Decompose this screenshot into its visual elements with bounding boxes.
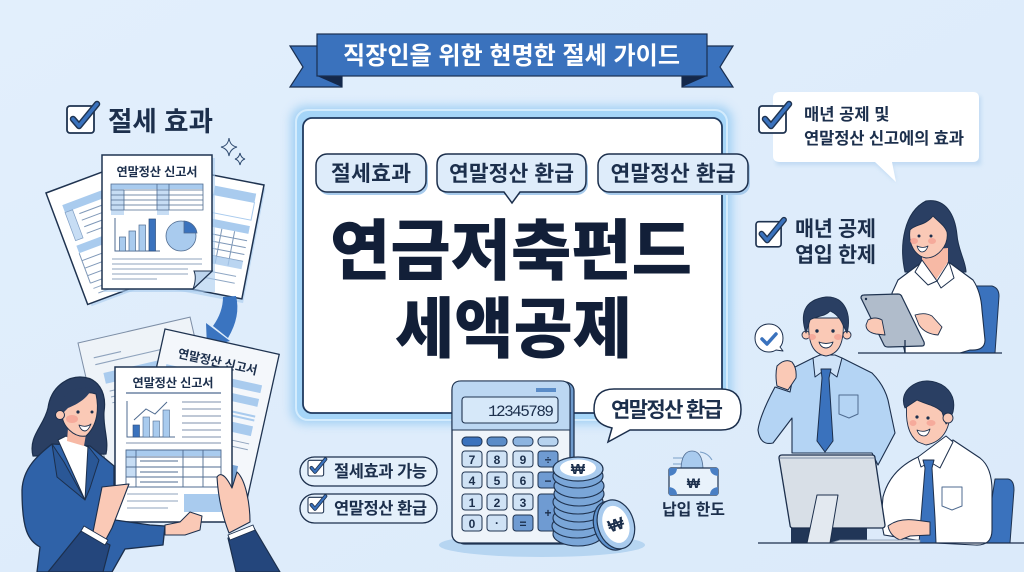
shirt (758, 358, 895, 465)
shirt (58, 436, 89, 500)
head (906, 397, 950, 445)
icon: calculator: + (544, 506, 552, 520)
desk line (858, 340, 1002, 353)
shirt (892, 262, 985, 353)
front sheet 연말정산 신고서: 연말정산 신고서 (116, 165, 198, 179)
heading: 절세 효과 (67, 104, 213, 137)
main title (330, 214, 692, 366)
illustration: woman with tablet (858, 201, 1002, 353)
icon: calculator: 12345789 (488, 403, 554, 421)
speech bubble: 연말정산 환급 (594, 389, 741, 442)
tie (817, 369, 833, 452)
icon: calculator: − (544, 474, 552, 488)
icon: calculator: 3 (520, 496, 527, 510)
pocket (839, 395, 858, 418)
callout: 매년 공제 및 연말정산 신고에의 효과: 연말정산 신고에의 효과 (804, 129, 964, 148)
tag: 연말정산 환급: 연말정산 환급 (610, 162, 736, 186)
icon: won coin stack: ₩ (571, 461, 586, 478)
icon: calculator: 6 (520, 474, 527, 488)
illustration: man at desk with computer (758, 381, 1024, 545)
speech bubble: 연말정산 환급: 연말정산 환급 (611, 399, 723, 422)
right rotated sheet (160, 169, 266, 303)
icon: calculator: 0 (469, 517, 476, 531)
left rotated sheet (46, 167, 159, 307)
blazer (22, 444, 165, 572)
icon: calculator: · (495, 516, 499, 530)
chair (963, 286, 999, 353)
icon: calculator: ÷ (545, 453, 552, 467)
tag: 연말정산 환급 (598, 154, 750, 195)
front sheet 연말정산 신고서: 연말정산 신고서 (132, 376, 214, 390)
desk line (758, 542, 1024, 544)
hair (903, 201, 966, 272)
fist (776, 361, 796, 390)
front sheet 연말정산 신고서 (102, 155, 215, 292)
pocket (942, 487, 962, 510)
tie (919, 460, 936, 543)
documents: lower stack (78, 317, 279, 522)
checklist: 매년 공제 엽입 한제 (756, 218, 876, 267)
tablet (861, 294, 924, 347)
tag: 절세효과 (316, 154, 428, 195)
check speech bubble (755, 324, 783, 352)
title ribbon (290, 34, 733, 87)
icon: won coin stack (552, 457, 641, 555)
heading: 절세 효과: 절세 효과 (108, 107, 213, 137)
arrow: down to documents (206, 296, 237, 347)
panel: central title card (291, 106, 750, 424)
middle sheet 연말정산 신고서 (133, 329, 279, 501)
icon: calculator: 9 (520, 453, 527, 467)
middle sheet 연말정산 신고서: 연말정산 신고서 (177, 347, 259, 378)
face and neck (922, 248, 948, 280)
lapels (52, 444, 99, 500)
icon: won coin stack: ₩ (605, 513, 628, 536)
illustration: man standing with raised fist (755, 297, 895, 465)
main title: 세액공제 (395, 292, 632, 366)
icon: sparkles (221, 138, 245, 165)
back sheet (78, 317, 220, 475)
label: 납입 한도: 납입 한도 (662, 501, 725, 519)
icon: calculator: 7 (469, 453, 476, 467)
icon: calculator: = (519, 517, 527, 531)
icon: won banknote: ₩ (687, 475, 701, 491)
icon: calculator: 5 (494, 474, 501, 488)
dark sleeves (48, 530, 110, 572)
hands (866, 318, 885, 335)
documents: top stack (46, 155, 266, 307)
neck and face (67, 428, 87, 446)
title ribbon: 직장인을 위한 현명한 절세 가이드 (343, 42, 680, 70)
icon: calculator: 4 (469, 474, 476, 488)
icon: calculator: 8 (494, 453, 501, 467)
icon: won banknote (669, 451, 718, 495)
lower hand (165, 512, 202, 535)
tag: 연말정산 환급 with pointer: 연말정산 환급 (449, 162, 574, 186)
illustration: woman presenting documents (22, 377, 280, 572)
icon: calculator: 1 (469, 496, 476, 510)
hand (888, 520, 930, 540)
shadow under calculator (439, 533, 645, 557)
tag: 연말정산 환급 with pointer (437, 154, 588, 203)
hair (32, 377, 107, 456)
icon: calculator (452, 381, 574, 544)
head (802, 331, 810, 339)
pill: 절세효과 가능: 절세효과 가능 (334, 462, 427, 481)
callout: 매년 공제 및 연말정산 신고에의 효과 (759, 92, 981, 182)
right hand (217, 472, 250, 533)
callout: 매년 공제 및 연말정산 신고에의 효과: 매년 공제 및 (804, 105, 890, 124)
check pills (300, 457, 437, 523)
shirt (881, 440, 992, 545)
tag: 절세효과: 절세효과 (331, 162, 411, 186)
chair (985, 479, 1014, 543)
pill: 연말정산 환급: 연말정산 환급 (334, 499, 427, 518)
main title: 연금저축펀드 (330, 214, 692, 288)
checklist: 매년 공제 엽입 한제: 엽입 한제 (795, 244, 876, 267)
icon: calculator: 2 (494, 496, 501, 510)
checklist: 매년 공제 엽입 한제: 매년 공제 (795, 218, 876, 241)
front sheet 연말정산 신고서 (115, 367, 232, 522)
computer monitor (779, 455, 920, 543)
left hand (92, 484, 129, 541)
